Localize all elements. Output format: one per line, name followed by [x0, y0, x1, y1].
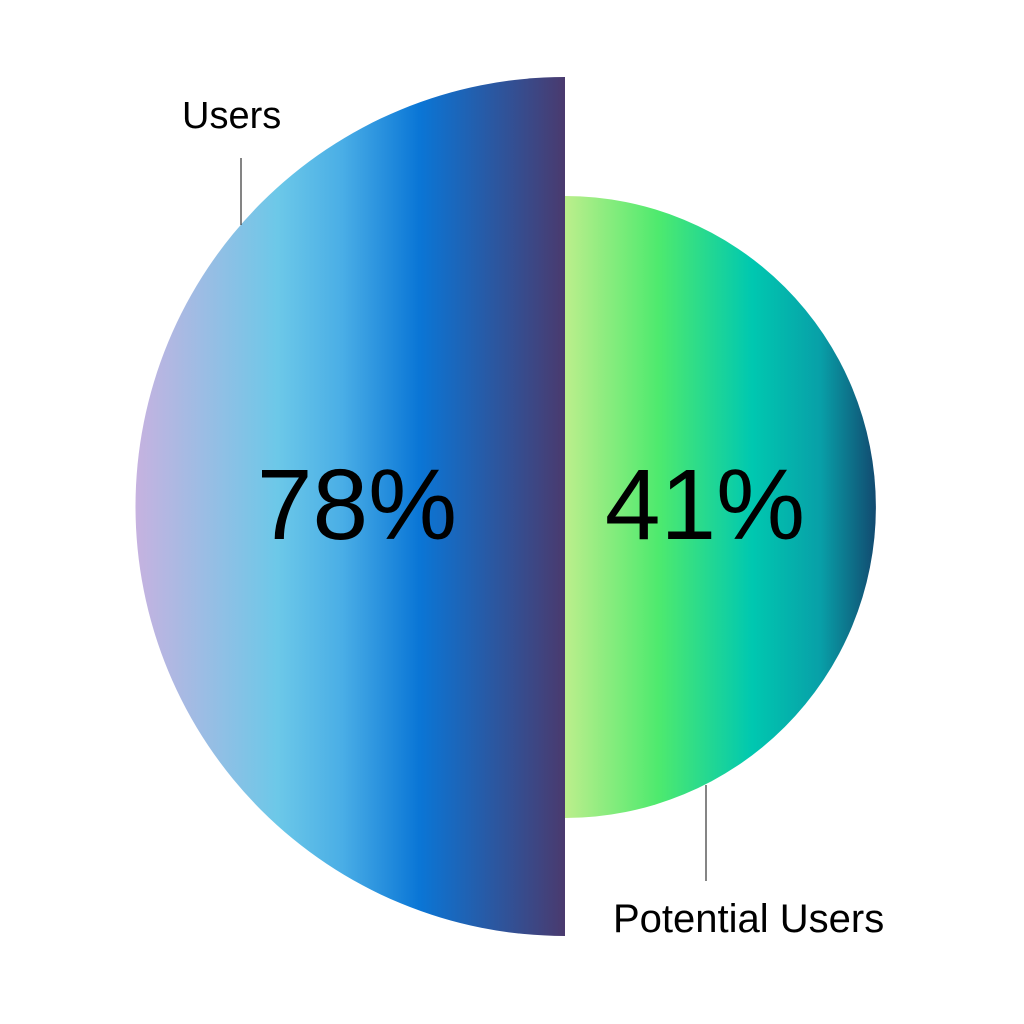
leader line potential users — [705, 785, 707, 881]
right half circle: potential users — [565, 196, 876, 818]
label: potential users: Potential Users — [613, 897, 884, 941]
left half circle: users — [135, 77, 565, 936]
users percentage: 78% — [257, 449, 457, 561]
label: users: Users — [182, 95, 281, 137]
potential users percentage: 41% — [605, 449, 805, 561]
leader line users — [240, 158, 242, 225]
